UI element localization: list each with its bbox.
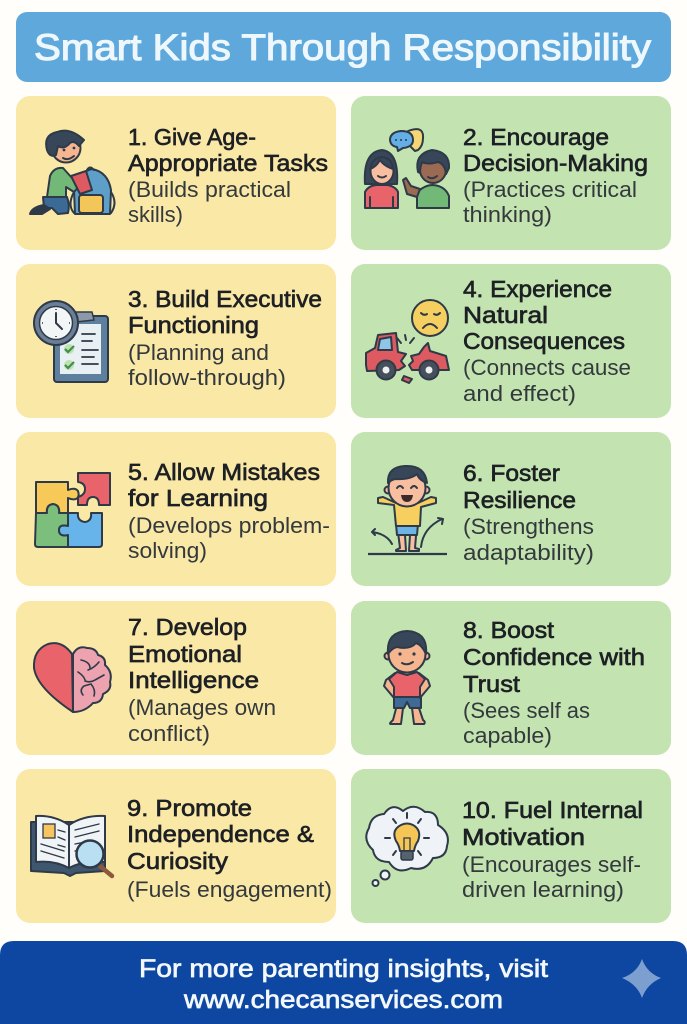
panel: 7 emotional intelligence: [16, 601, 336, 755]
panel: 8 confidence with trust: [351, 601, 671, 755]
icon: two kids talking: [365, 129, 449, 208]
text block: (Sees self as: [463, 698, 590, 723]
text block: adaptability): [463, 540, 594, 565]
icon: heart and brain: [34, 643, 111, 712]
text block: follow-through): [128, 365, 286, 390]
panel: 1 age-appropriate tasks: [16, 96, 336, 250]
text block: thinking): [463, 202, 552, 227]
text block: Curiosity: [127, 848, 229, 874]
icon: confident boy: [384, 631, 430, 724]
text block: 10. Fuel Internal: [462, 797, 643, 823]
title: Smart Kids Through Responsibility: [34, 27, 652, 68]
icon: sparkle star: [622, 959, 661, 998]
text block: 1. Give Age-: [128, 124, 256, 150]
panel: 2 decision-making: [351, 96, 671, 250]
text block: [463, 617, 645, 748]
text block: Resilience: [463, 487, 576, 513]
text block: (Strengthens: [463, 514, 594, 539]
text block: [128, 614, 276, 746]
panel: 6 resilience: [351, 432, 671, 586]
text block: [463, 124, 648, 227]
text block: [127, 795, 332, 902]
text block: (Builds practical: [128, 177, 291, 202]
text block: 2. Encourage: [463, 124, 609, 150]
text block: and effect): [463, 381, 576, 406]
text block: (Planning and: [128, 340, 269, 365]
text block: (Fuels engagement): [127, 877, 332, 902]
text block: Consequences: [463, 328, 625, 354]
panel: 3 executive functioning: [16, 264, 336, 418]
text block: (Develops problem-: [128, 513, 330, 538]
text block: Emotional: [128, 641, 242, 667]
icon: open book with magnifier: [31, 816, 112, 876]
footer text: For more parenting insights, visit: [139, 955, 548, 983]
text block: [128, 286, 322, 390]
text block: Intelligence: [128, 667, 259, 693]
text block: solving): [128, 538, 207, 563]
text block: skills): [128, 202, 183, 227]
footer text: www.checanservices.com: [183, 986, 503, 1014]
text block: Appropriate Tasks: [128, 150, 328, 176]
text block: [463, 460, 594, 565]
text block: Functioning: [128, 312, 259, 338]
text block: (Manages own: [128, 695, 276, 720]
text block: Decision-Making: [463, 150, 648, 176]
text block: 8. Boost: [463, 617, 555, 643]
icon: boy packing backpack: [30, 131, 114, 214]
text block: Confidence with: [463, 644, 645, 670]
text block: (Connects cause: [463, 355, 631, 380]
text block: Independence &: [127, 821, 314, 847]
text block: driven learning): [462, 877, 624, 902]
icon: sad face and crashed car: [366, 300, 449, 383]
text block: 7. Develop: [128, 614, 247, 640]
text block: [462, 797, 643, 902]
icon: puzzle pieces: [35, 473, 110, 547]
text block: conflict): [128, 721, 210, 746]
text block: (Encourages self-: [462, 852, 641, 877]
text block: [128, 459, 330, 563]
icon: jumping boy: [368, 466, 447, 554]
text block: 6. Foster: [463, 460, 560, 486]
text block: for Learning: [128, 485, 268, 511]
text block: Trust: [463, 671, 521, 697]
text block: 3. Build Executive: [128, 286, 322, 312]
text block: Natural: [463, 302, 548, 328]
footer banner: [0, 941, 687, 1024]
panel: 9 independence and curiosity: [16, 769, 336, 923]
text block: Motivation: [462, 824, 585, 850]
text block: 5. Allow Mistakes: [128, 459, 320, 485]
text block: [463, 276, 631, 406]
footer text: [139, 955, 548, 1014]
text block: 4. Experience: [463, 276, 612, 302]
text block: capable): [463, 723, 552, 748]
title banner: [16, 12, 671, 82]
text block: 9. Promote: [127, 795, 252, 821]
icon: thought cloud with lightbulb: [366, 807, 448, 886]
panel: 4 natural consequences: [351, 264, 671, 418]
text block: (Practices critical: [463, 177, 637, 202]
panel: 10 internal motivation: [351, 769, 671, 923]
text block: [128, 124, 328, 227]
icon: clock and checklist: [34, 301, 108, 382]
panel: 5 mistakes for learning: [16, 432, 336, 586]
